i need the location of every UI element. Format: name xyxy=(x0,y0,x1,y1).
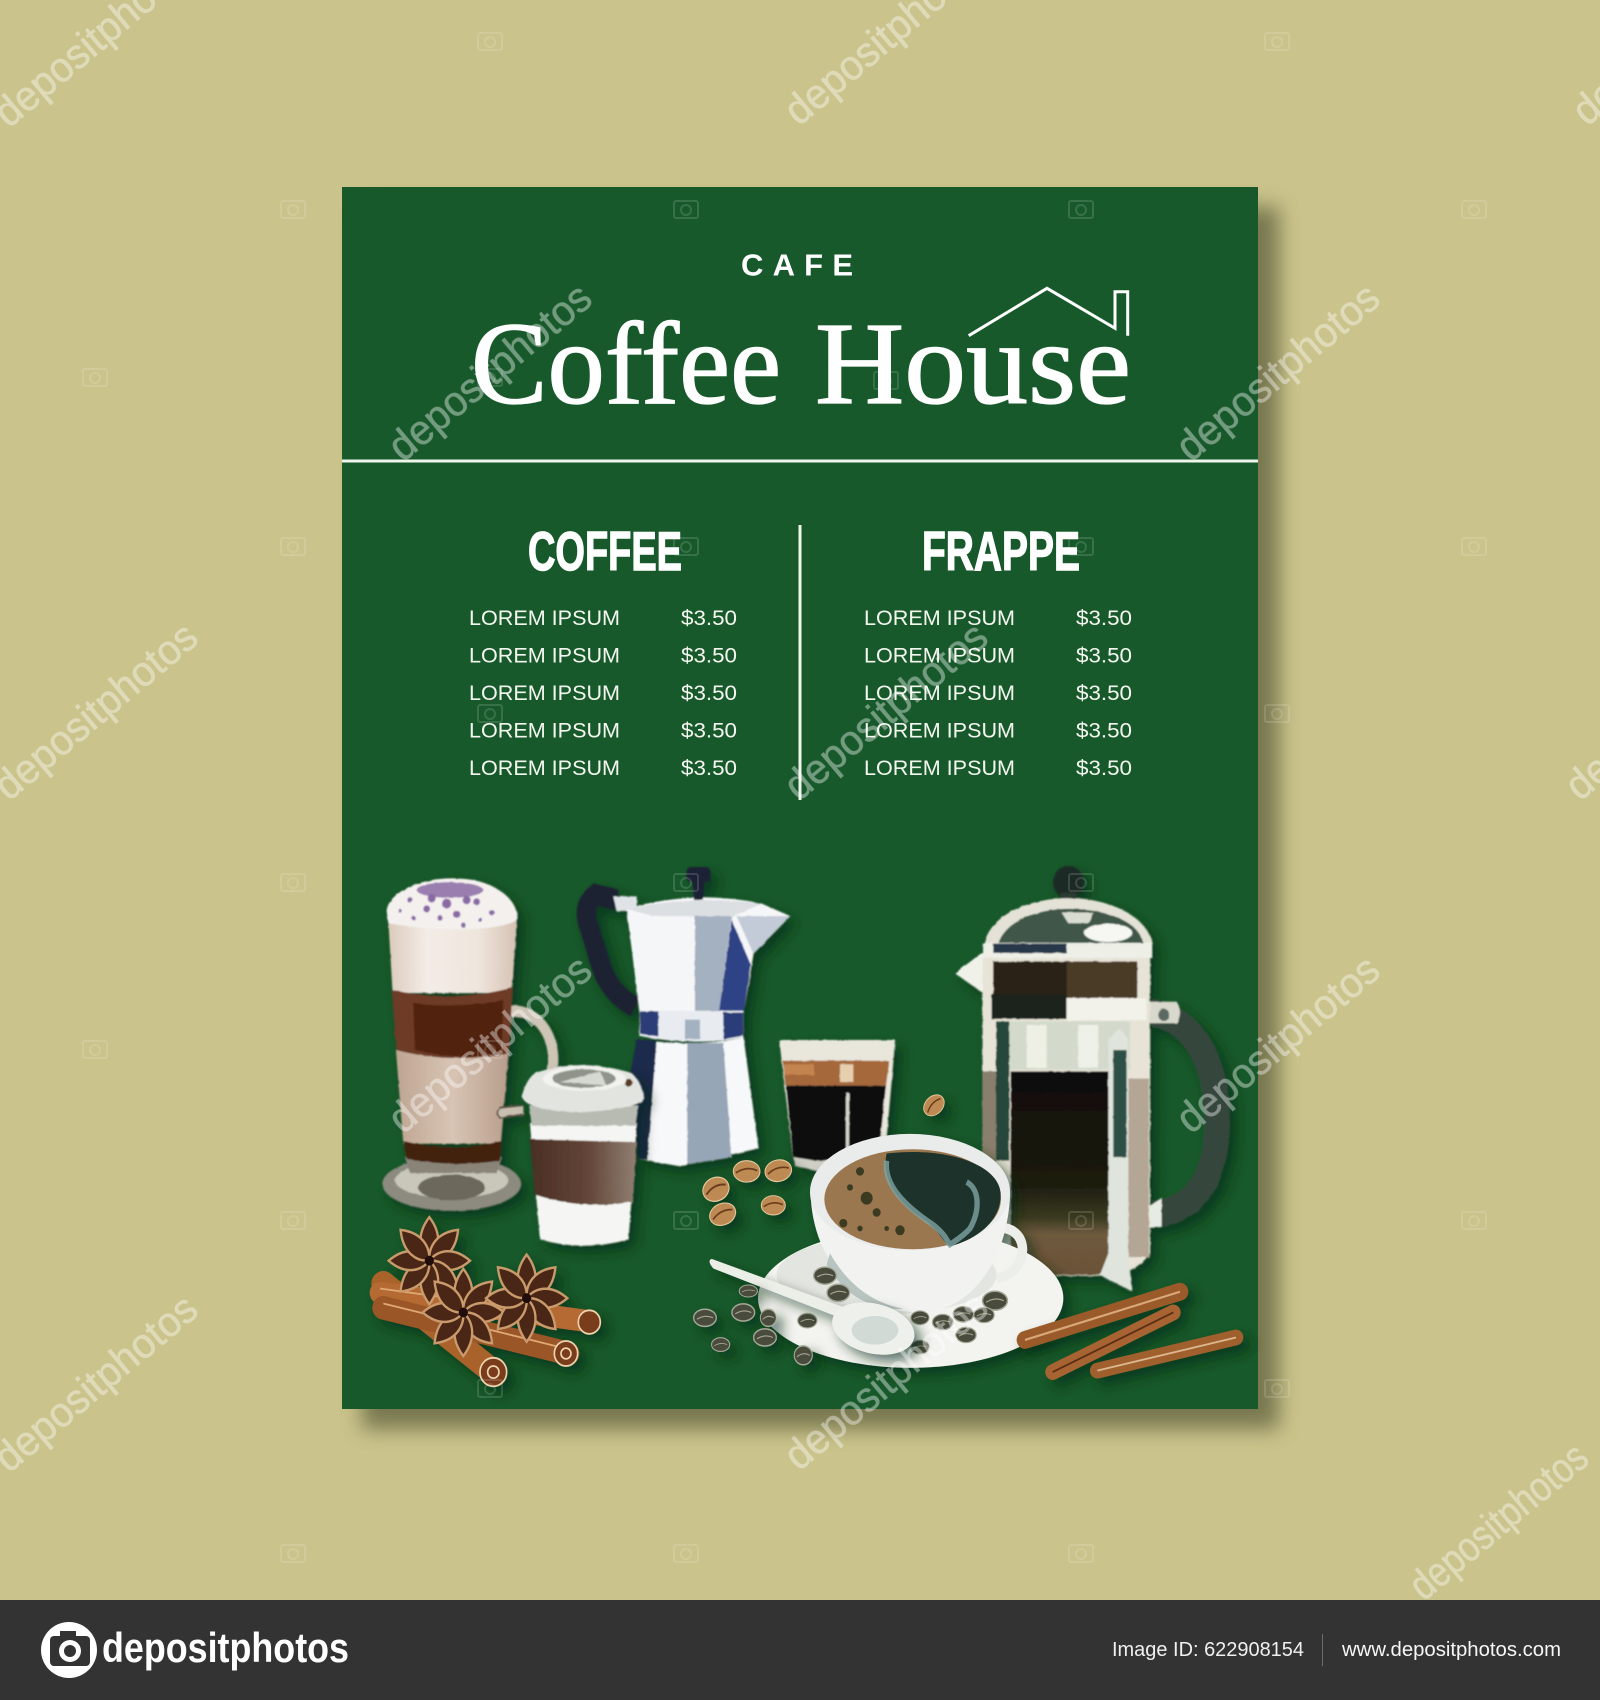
title: coffee house: House xyxy=(815,298,1131,429)
image id: Image ID: 622908154 xyxy=(1112,1639,1304,1661)
coffee item names: LOREM IPSUM xyxy=(469,682,620,705)
watermark: depositphotos repeats: depositphotos xyxy=(1167,273,1388,470)
icon: spoon xyxy=(710,1259,919,1362)
watermark: depositphotos repeats: depositphotos xyxy=(379,945,600,1142)
frappe item names: LOREM IPSUM xyxy=(864,757,1015,780)
frappe prices xyxy=(1076,607,1132,780)
heading: coffee: COFFEE xyxy=(528,520,682,582)
heading: frappe: FRAPPE xyxy=(922,520,1080,582)
illustration: coffee still life xyxy=(380,866,1236,1386)
frappe item names: LOREM IPSUM xyxy=(864,644,1015,668)
poster shadow xyxy=(362,207,1279,1429)
watermark: depositphotos repeats: depositphotos xyxy=(379,273,600,470)
title: coffee house xyxy=(471,298,1131,429)
frappe item names: LOREM IPSUM xyxy=(864,720,1015,742)
coffee item names xyxy=(469,607,620,780)
icon: cinnamon sticks xyxy=(1025,1292,1236,1372)
watermark: camera marks xyxy=(83,33,1486,1562)
brand wordmark: depositphotos xyxy=(102,1624,349,1671)
header rule xyxy=(342,460,1258,462)
icon: depositphotos logo xyxy=(41,1622,97,1678)
column divider xyxy=(798,525,802,800)
icon: layered latte glass xyxy=(382,878,553,1211)
watermark: depositphotos repeats: depositphotos xyxy=(775,612,996,809)
icon: house roof xyxy=(969,288,1128,336)
coffee prices: $3.50 xyxy=(681,607,737,630)
frappe item names: LOREM IPSUM xyxy=(864,607,1015,630)
panel: frappe menu xyxy=(864,520,1132,780)
coffee prices: $3.50 xyxy=(681,720,737,742)
icon: saucer and cup xyxy=(758,1134,1063,1368)
heading: cafe: CAFE xyxy=(741,248,853,282)
footer bar xyxy=(0,1600,1600,1700)
coffee item names: LOREM IPSUM xyxy=(469,757,620,780)
frappe prices: $3.50 xyxy=(1076,607,1132,630)
icon: moka pot xyxy=(586,867,790,1166)
frappe prices: $3.50 xyxy=(1076,644,1132,668)
coffee item names: LOREM IPSUM xyxy=(469,720,620,742)
frappe item names: LOREM IPSUM xyxy=(864,682,1015,705)
website: www.depositphotos.com xyxy=(1341,1639,1561,1661)
coffee prices: $3.50 xyxy=(681,644,737,668)
coffee prices: $3.50 xyxy=(681,757,737,780)
icon: brown coffee beans xyxy=(700,1091,948,1229)
icon: takeaway cup xyxy=(522,1065,644,1245)
frappe prices: $3.50 xyxy=(1076,682,1132,705)
footer separator xyxy=(1322,1634,1323,1666)
title: coffee house: Coffee xyxy=(471,298,781,429)
frappe item names xyxy=(864,607,1015,780)
coffee item names: LOREM IPSUM xyxy=(469,607,620,630)
frappe prices: $3.50 xyxy=(1076,757,1132,780)
watermark: depositphotos repeats: depositphotos xyxy=(775,1282,996,1479)
coffee prices: $3.50 xyxy=(681,682,737,705)
poster panel xyxy=(342,187,1258,1409)
coffee item names: LOREM IPSUM xyxy=(469,644,620,668)
icon: french press xyxy=(955,866,1217,1291)
watermark: depositphotos repeats: depositphotos xyxy=(1167,945,1388,1142)
panel: coffee menu xyxy=(469,520,737,780)
coffee prices xyxy=(681,607,737,780)
icon: cinnamon and star anise xyxy=(380,1217,600,1386)
icon: espresso glass xyxy=(779,1040,895,1173)
icon: grey coffee beans xyxy=(694,1285,812,1365)
frappe prices: $3.50 xyxy=(1076,720,1132,742)
